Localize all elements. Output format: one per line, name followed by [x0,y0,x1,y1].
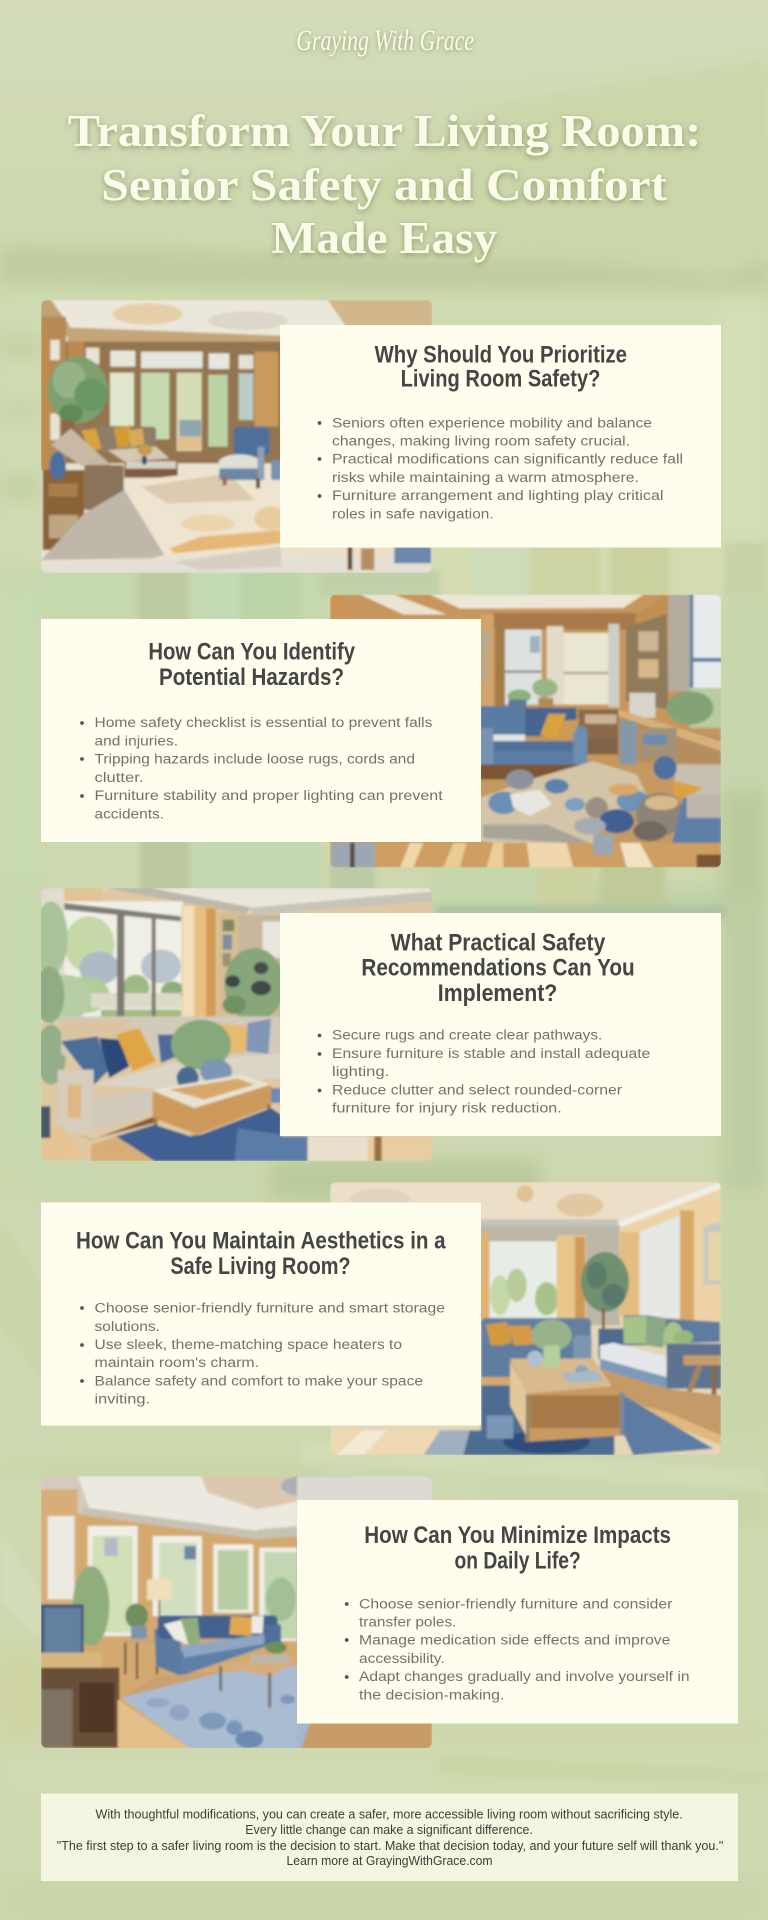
panel: maintain aesthetics [41,1182,721,1455]
footer callout [41,1794,738,1881]
footer callout: Learn more at GrayingWithGrace.com [286,1853,493,1868]
panel: practical safety recommendations [34,888,721,1161]
bullet list: Seniors often experience mobility and balance [332,415,652,430]
panel: why prioritize living room safety [41,300,721,573]
card [297,1500,738,1724]
bullet list [345,1596,690,1702]
heading: How Can You Identify [148,639,356,666]
heading: Why Should You Prioritize [375,342,627,369]
card [41,619,481,842]
bullet list: Adapt changes gradually and involve yourself in [359,1669,690,1684]
footer callout: With thoughtful modifications, you can create a safer, more accessible living room without sacrificing style. [96,1806,683,1821]
bullet list: accessibility. [359,1651,445,1666]
heading [76,1228,446,1280]
bullet list: furniture for injury risk reduction. [332,1101,562,1116]
heading: Implement? [438,980,557,1007]
footer callout: Every little change can make a significant difference. [245,1822,533,1837]
heading: Safe Living Room? [170,1253,351,1280]
bullet list: roles in safe navigation. [332,506,494,522]
bullet list: Tripping hazards include loose rugs, cords and [94,752,415,766]
bullet list: Practical modifications can significantly reduce fall [332,452,683,467]
heading: Potential Hazards? [159,664,344,691]
bullet list: inviting. [94,1392,150,1407]
bullet list: changes, making living room safety crucial. [332,433,630,448]
heading: Living Room Safety? [401,366,600,393]
bullet list: Choose senior-friendly furniture and smart storage [94,1301,445,1316]
heading: How Can You Maintain Aesthetics in a [76,1228,446,1254]
bullet list: maintain room's charm. [94,1355,259,1370]
bullet list: the decision-making. [359,1687,504,1702]
bullet list: Choose senior-friendly furniture and consider [359,1596,673,1611]
title [68,106,701,263]
bullet list: Balance safety and comfort to make your space [94,1373,423,1388]
heading [375,342,627,393]
bullet list: accidents. [94,806,164,821]
bullet list: Secure rugs and create clear pathways. [332,1028,602,1043]
bullet list: Home safety checklist is essential to prevent falls [94,715,433,730]
heading: How Can You Minimize Impacts [364,1522,671,1549]
illustration: cluttered living room with blue sofa [330,594,722,867]
bullet list: risks while maintaining a warm atmosphere. [332,470,639,485]
bullet list: and injuries. [94,733,178,748]
bullet list: Reduce clutter and select rounded-corner [332,1082,623,1098]
bullet list: Furniture arrangement and lighting play critical [332,488,664,503]
bullet list: Use sleek, theme-matching space heaters to [94,1337,402,1352]
panel: minimize impacts on daily life [41,1473,738,1749]
card [41,1202,481,1426]
bullet list: Manage medication side effects and improve [359,1633,670,1648]
heading: What Practical Safety [391,930,606,956]
illustration: blue sofas, wooden table and tiled blue rug [330,1182,721,1455]
title: Made Easy [271,213,498,263]
card [280,913,721,1136]
illustration: sunlit living room with french doors [41,300,433,573]
heading [361,930,635,1007]
bullet list: solutions. [94,1319,160,1334]
heading [364,1522,671,1575]
bullet list [318,415,683,522]
heading: on Daily Life? [454,1548,581,1575]
card [280,325,721,548]
logo: Graying With Grace: Graying With Grace [296,24,474,57]
title: Transform Your Living Room: [68,106,701,156]
bullet list: transfer poles. [359,1614,456,1630]
heading [148,639,356,691]
illustration: bright room with television and mottled blue rug [41,1473,433,1749]
bullet list [318,1028,650,1116]
bullet list: clutter. [94,770,144,785]
bullet list [80,1301,445,1407]
title: Senior Safety and Comfort [101,160,667,210]
bullet list: Ensure furniture is stable and install adequate [332,1046,650,1061]
illustration: beige sofa with navy and gold pillows [34,888,432,1161]
bullet list: Furniture stability and proper lighting can prevent [94,788,443,803]
heading: Recommendations Can You [361,954,635,981]
bullet list: lighting. [332,1064,389,1079]
bullet list [80,715,443,821]
footer callout: "The first step to a safer living room is the decision to start. Make that decision today, and your future self will thank you." [57,1838,724,1853]
panel: identify potential hazards [41,594,722,867]
